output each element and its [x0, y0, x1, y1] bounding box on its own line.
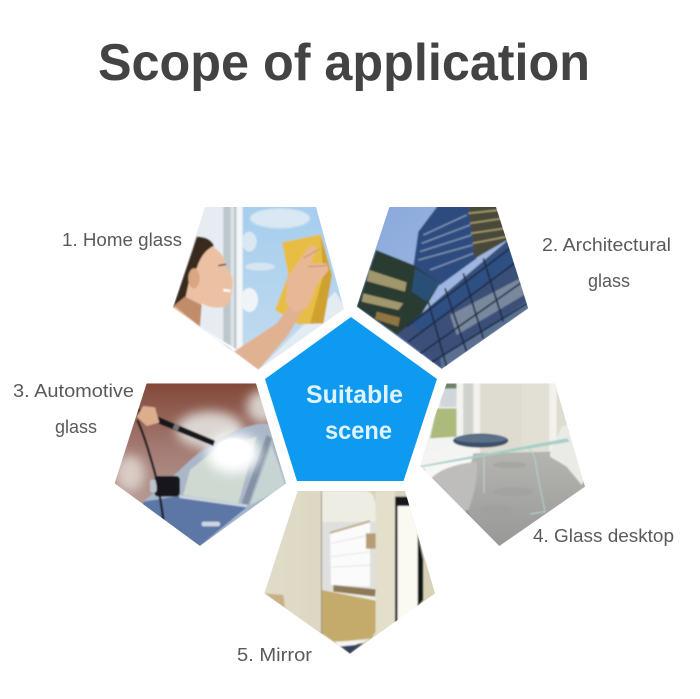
label: mirror: 5. Mirror [237, 645, 312, 665]
photo panel: automotive glass [110, 380, 290, 550]
center label: Suitable [306, 381, 403, 409]
table [420, 438, 570, 467]
bowl [453, 434, 508, 448]
car [140, 424, 290, 548]
label: automotive glass: glass [55, 417, 97, 437]
floor [460, 452, 590, 548]
woman [173, 245, 234, 324]
label: architectural glass: 2. Architectural [542, 235, 671, 255]
chair [432, 462, 477, 512]
title: Scope of application [98, 34, 590, 92]
center pentagon [265, 317, 437, 481]
label: glass desktop: 4. Glass desktop [533, 526, 674, 546]
photo panel: architectural glass [353, 205, 533, 372]
photo panel: home glass [170, 205, 350, 375]
mirror [322, 491, 376, 643]
photo panel: glass desktop [417, 380, 590, 550]
door [395, 497, 398, 627]
label: automotive glass: 3. Automotive [13, 381, 134, 401]
label: architectural glass: glass [588, 271, 630, 291]
photo panel: mirror [262, 488, 438, 658]
towel [274, 234, 324, 326]
washer lance [137, 408, 215, 446]
center label: scene [325, 417, 392, 445]
label: home glass: 1. Home glass [62, 230, 182, 250]
